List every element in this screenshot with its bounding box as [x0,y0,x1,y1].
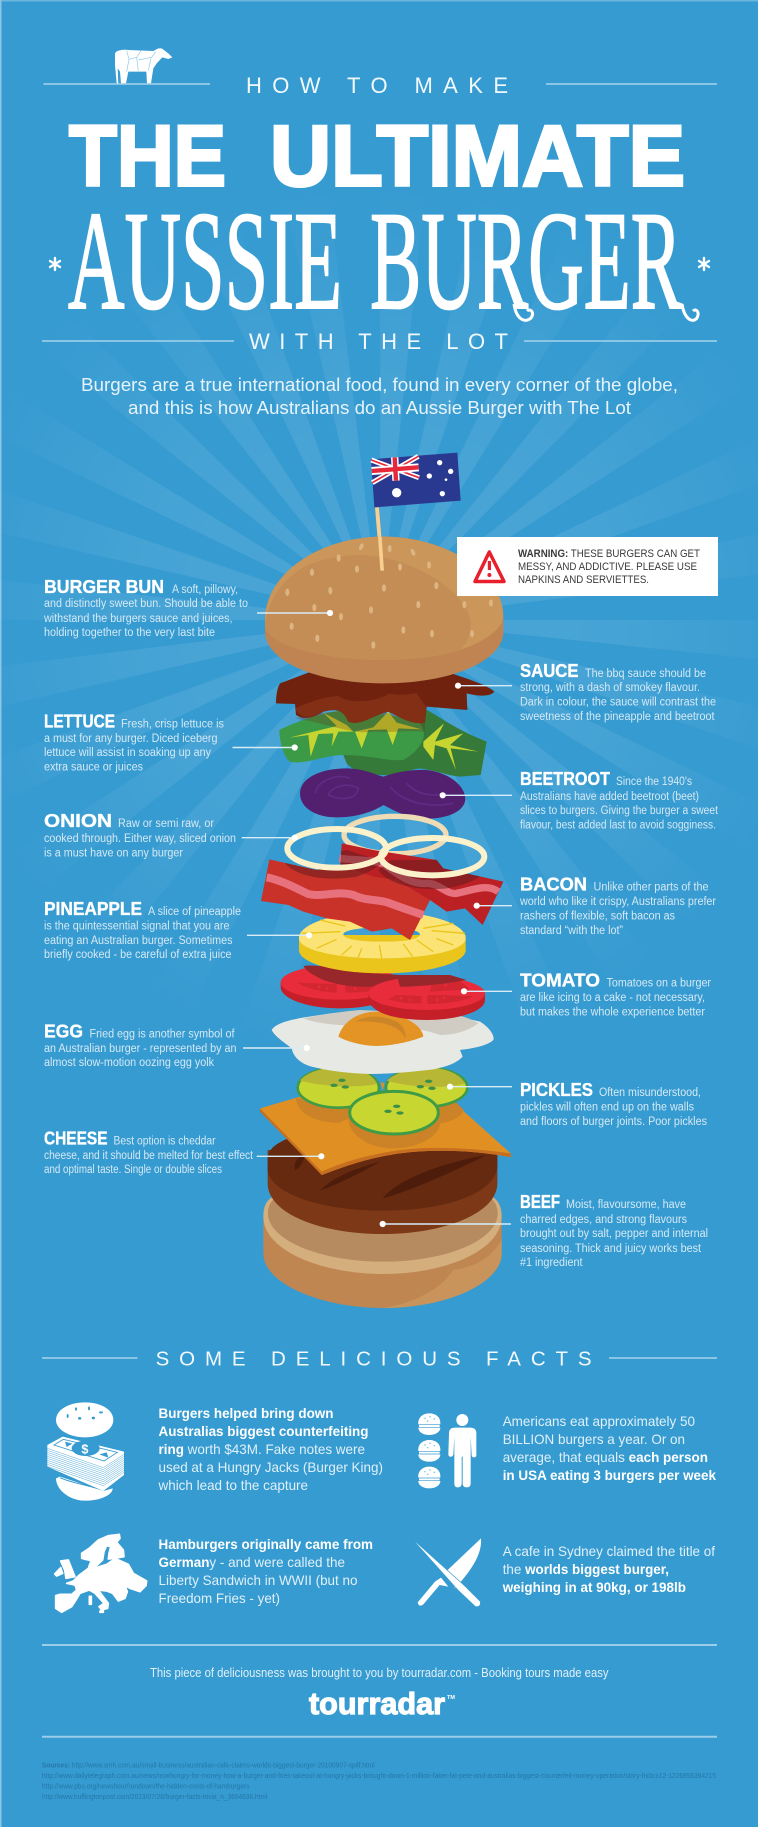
title: the ultimate [69,108,685,204]
text: counterfeiting fact: Australias biggest counterfeiting [158,1423,368,1439]
intro text [81,374,678,418]
label: pickles: PICKLES [520,1080,593,1100]
onion rings [287,829,484,875]
label: egg [44,1021,236,1069]
label: beef: seasoning. Thick and juicy works best [520,1243,702,1255]
label: pineapple: A slice of pineapple [148,906,241,918]
title: the ultimate: THE [69,108,226,204]
label: beef: #1 ingredient [520,1257,583,1269]
label: bacon: world who like it crispy, Australians prefer [519,896,716,908]
label: pickles: pickles will often end up on the walls [520,1102,694,1114]
label: lettuce: extra sauce or juices [44,762,143,774]
label: burger bun: A soft, pillowy, [172,584,238,596]
label: cheese: cheese, and it should be melted for best effect [44,1150,254,1162]
burger illustration [260,453,511,1308]
beetroot [300,768,465,819]
icon: australian flag [371,453,461,571]
label: tomato [520,971,711,1018]
icon: stars [50,258,709,270]
label: egg: Fried egg is another symbol of [90,1028,235,1040]
text: american burger fact: average, that equals each person [503,1449,708,1465]
label: cheese: Best option is cheddar [114,1135,216,1147]
label: sauce: sweetness of the pineapple and beetroot [520,711,715,723]
text: sources: http://www.pbs.org/newshour/rundown/the-hidden-costs-of-hamburgers [42,1783,250,1790]
label: cheese [44,1128,254,1176]
label: tomato: but makes the whole experience better [520,1006,705,1018]
label: lettuce: LETTUCE [44,711,115,731]
text: germany fact: Freedom Fries - yet) [158,1590,280,1606]
label: onion [44,811,236,860]
text: sources [42,1763,716,1801]
text: american burger fact: in USA eating 3 burgers per week [503,1467,716,1483]
icon: crossed knives [415,1538,481,1606]
label: beetroot: BEETROOT [520,769,610,789]
label: beef: Moist, flavoursome, have [566,1199,686,1211]
logo: tourradar: tourradar [309,1686,445,1721]
text: sources: Sources: http://www.smh.com.au/small-business/australian-cafe-claims-worlds-biggest-burger-20100907-xpilf.html [42,1763,375,1770]
bacon [261,843,503,940]
text: counterfeiting fact: Burgers helped bring down [158,1405,334,1421]
icon: burgers and person [418,1413,476,1488]
label: lettuce: lettuce will assist in soaking up any [44,747,211,759]
label: beetroot: slices to burgers. Giving the burger a sweet [520,805,719,817]
egg [272,1010,494,1074]
text: credit: This piece of deliciousness was brought to you by tourradar.com - Booking tours made easy [150,1666,609,1680]
onion back ring [344,816,446,854]
intro text: and this is how Australians do an Aussie Burger with The Lot [128,397,631,418]
label: lettuce: Fresh, crisp lettuce is [121,718,224,730]
title: the ultimate: ULTIMATE [270,108,685,204]
label: bacon: BACON [520,875,587,895]
label: onion: cooked through. Either way, sliced onion [44,833,236,845]
label: tomato: TOMATO [520,971,600,991]
text: germany fact [158,1536,373,1606]
text: counterfeiting fact: ring worth $43M. Fake notes were [158,1441,365,1457]
text: counterfeiting fact [158,1405,383,1493]
label: burger bun: BURGER BUN [44,577,164,597]
text: american burger fact: BILLION burgers a year. Or on [503,1431,685,1447]
label: tomato: Tomatoes on a burger [606,978,711,990]
label: sauce: The bbq sauce should be [585,668,706,680]
text: counterfeiting fact: which lead to the capture [158,1477,308,1493]
text: sources: http://www.huffingtonpost.com/2013/07/28/burger-facts-trivia_n_3654636.html [42,1794,268,1801]
heading: some delicious facts: SOME DELICIOUS FACTS [156,1348,592,1371]
tomato [281,965,485,1020]
label: pineapple: eating an Australian burger. Sometimes [44,935,233,947]
burger bun [265,537,503,683]
label: onion: Raw or semi raw, or [118,818,214,830]
label: pineapple: briefly cooked - be careful of extra juice [44,949,232,961]
label: beetroot: Since the 1940's [616,776,692,788]
label: pickles: Often misunderstood, [599,1087,701,1099]
heading: how to make: HOW TO MAKE [246,73,508,98]
label: egg: almost slow-motion oozing egg yolk [44,1057,214,1069]
label: onion: is a must have on any burger [44,848,183,860]
label: beetroot [520,769,719,832]
text: biggest burger fact: the worlds biggest burger, [503,1561,669,1577]
label: pineapple: PINEAPPLE [44,899,142,919]
label: sauce: SAUCE [520,661,578,681]
label: pineapple: is the quintessential signal that you are [44,920,230,932]
label: beetroot: Australians have added beetroot (beet) [520,791,699,803]
panel: warning [457,537,718,596]
icon: burger and money: $ [81,1442,88,1456]
icon: warning triangle [475,552,504,582]
label: onion: ONION [44,811,112,831]
label: pickles [520,1080,707,1128]
text: american burger fact: Americans eat approximately 50 [503,1413,695,1429]
label: cheese: and optimal taste. Single or double slices [44,1164,222,1176]
logo: tourradar: TM [447,1695,455,1701]
lettuce [279,710,487,777]
text: germany fact: Hamburgers originally came from [158,1536,373,1552]
icon: cow [115,48,172,83]
text: biggest burger fact: A cafe in Sydney claimed the title of [503,1543,715,1559]
label: cheese: CHEESE [44,1128,108,1148]
label: beef: BEEF [520,1192,560,1212]
pickles [298,1067,467,1134]
label: beetroot: flavour, best added last to avoid sogginess. [520,820,716,832]
label: sauce [520,661,716,723]
label: bacon: standard “with the lot” [520,925,623,937]
label: bacon: rashers of flexible, soft bacon as [520,910,675,922]
text: biggest burger fact [502,1543,715,1595]
callout lines [232,610,512,1227]
icon: europe map [55,1534,147,1612]
label: sauce: Dark in colour, the sauce will contrast the [520,696,716,708]
text: germany fact: Germany - and were called the [158,1554,345,1570]
panel: warning: MESSY, AND ADDICTIVE. PLEASE USE [518,561,697,573]
label: egg: an Australian burger - represented by an [44,1043,236,1055]
label: pickles: and floors of burger joints. Poor pickles [520,1116,707,1128]
label: burger bun: holding together to the very last bite [44,627,215,639]
label: beef [520,1192,708,1269]
label: beef: brought out by salt, pepper and internal [520,1228,708,1240]
heading: with the lot: WITH THE LOT [249,329,508,354]
text: sources: http://www.dailytelegraph.com.au/news/nswhungry-for-money-how-a-burger-and-fries-takeout-at-hungry-jacks-brought-down-1-million-faker-fat-pete-and-australias-biggest-counterfeit-money-operation/story-fni0cx12-1226856394215 [42,1773,716,1780]
panel: warning: WARNING: THESE BURGERS CAN GET [518,548,700,560]
bottom bun and beef [263,1123,502,1308]
icon: burger and money [47,1402,124,1501]
label: burger bun: withstand the burgers sauce and juices, [43,613,233,625]
text: american burger fact [503,1413,716,1483]
label: burger bun: and distinctly sweet bun. Should be able to [44,598,248,610]
label: burger bun [43,577,248,639]
text: biggest burger fact: weighing in at 90kg, or 198lb [502,1579,686,1595]
label: pineapple [44,899,241,961]
label: bacon [519,875,716,937]
label: beef: charred edges, and strong flavours [520,1214,687,1226]
text: counterfeiting fact: used at a Hungry Jacks (Burger King) [158,1459,383,1475]
pineapple [299,912,466,973]
label: sauce: strong, with a dash of smokey flavour. [520,682,700,694]
label: bacon: Unlike other parts of the [594,882,708,894]
title: aussie burger: AUSSIE [68,183,342,339]
label: lettuce: a must for any burger. Diced iceberg [44,733,218,745]
sauce [276,673,494,723]
label: lettuce [44,711,224,774]
panel: warning: NAPKINS AND SERVIETTES. [518,574,649,586]
label: tomato: are like icing to a cake - not necessary, [520,992,705,1004]
intro text: Burgers are a true international food, found in every corner of the globe, [81,374,678,395]
label: egg: EGG [44,1021,83,1041]
text: germany fact: Liberty Sandwich in WWII (but no [158,1572,358,1588]
cheese [260,1097,511,1175]
